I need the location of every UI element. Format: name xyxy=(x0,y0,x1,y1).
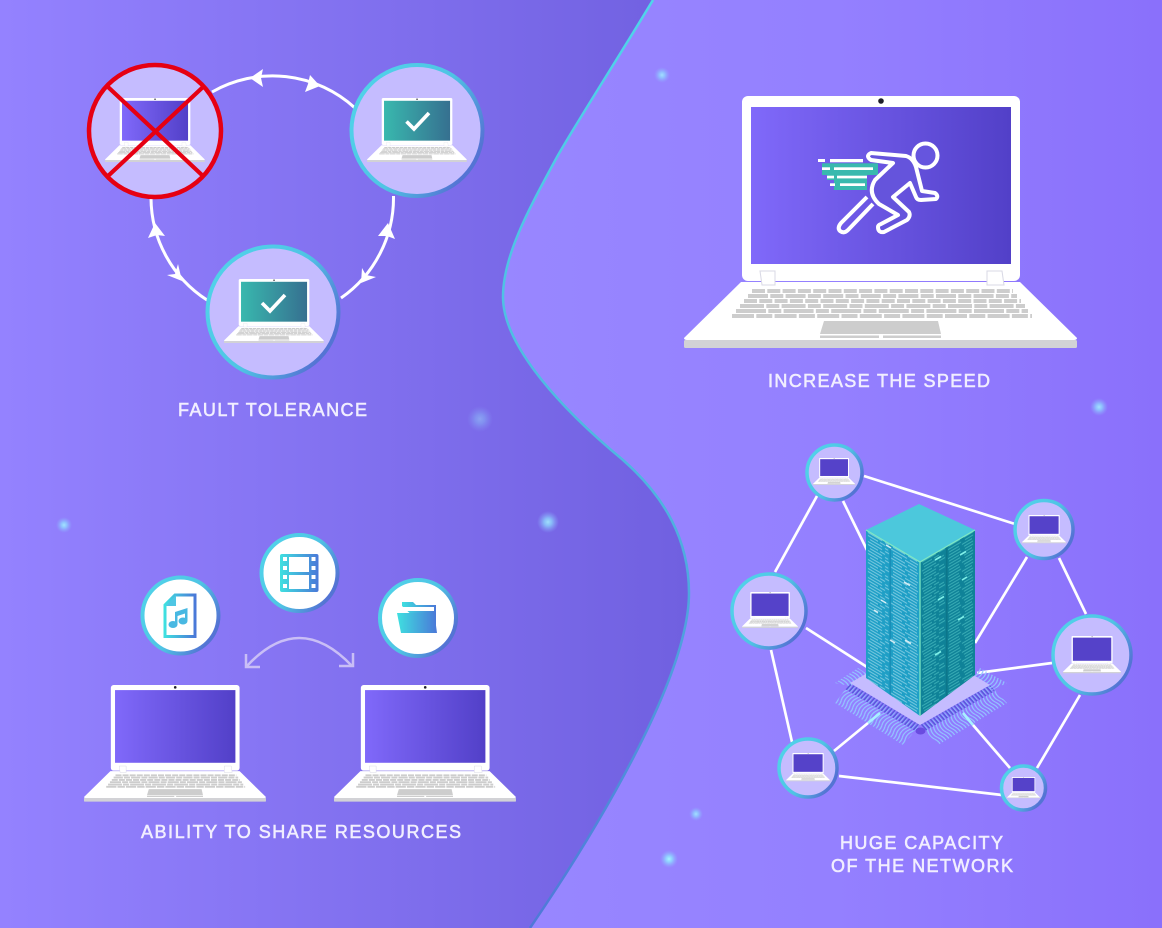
icon: runner xyxy=(818,144,938,232)
node: upper right xyxy=(1015,500,1073,558)
right laptop xyxy=(334,685,516,802)
left laptop xyxy=(84,685,266,802)
node: top xyxy=(807,445,862,500)
icon: folder xyxy=(380,580,456,656)
icon: music file xyxy=(142,578,218,654)
node: lower right xyxy=(1002,766,1046,810)
node: working laptop right xyxy=(352,65,482,196)
panel: increase the speed xyxy=(684,96,1077,391)
icon: film strip xyxy=(262,535,338,611)
node: left xyxy=(732,574,806,648)
label: share resources: ABILITY TO SHARE RESOURCES xyxy=(141,822,461,842)
ring with arrows xyxy=(148,69,395,300)
panel: fault tolerance xyxy=(89,65,482,420)
label: increase the speed: INCREASE THE SPEED xyxy=(768,371,990,391)
node: failed laptop xyxy=(89,65,221,197)
double arrow xyxy=(246,638,353,667)
panel: huge capacity xyxy=(732,445,1131,876)
label: fault tolerance: FAULT TOLERANCE xyxy=(178,400,367,420)
node: working laptop bottom xyxy=(208,246,338,378)
node: right xyxy=(1053,616,1131,694)
chip links xyxy=(834,713,1010,768)
wave edge xyxy=(503,0,689,928)
network links xyxy=(771,476,1086,795)
panel: share resources xyxy=(84,535,516,842)
glow dots xyxy=(56,67,1108,868)
large laptop xyxy=(684,96,1077,348)
left wave panel xyxy=(0,0,689,928)
label: huge capacity xyxy=(831,833,1013,876)
chip with server tower xyxy=(835,504,1007,745)
label: huge capacity: OF THE NETWORK xyxy=(831,856,1013,876)
label: huge capacity: HUGE CAPACITY xyxy=(840,833,1003,853)
node: lower left xyxy=(779,739,837,797)
